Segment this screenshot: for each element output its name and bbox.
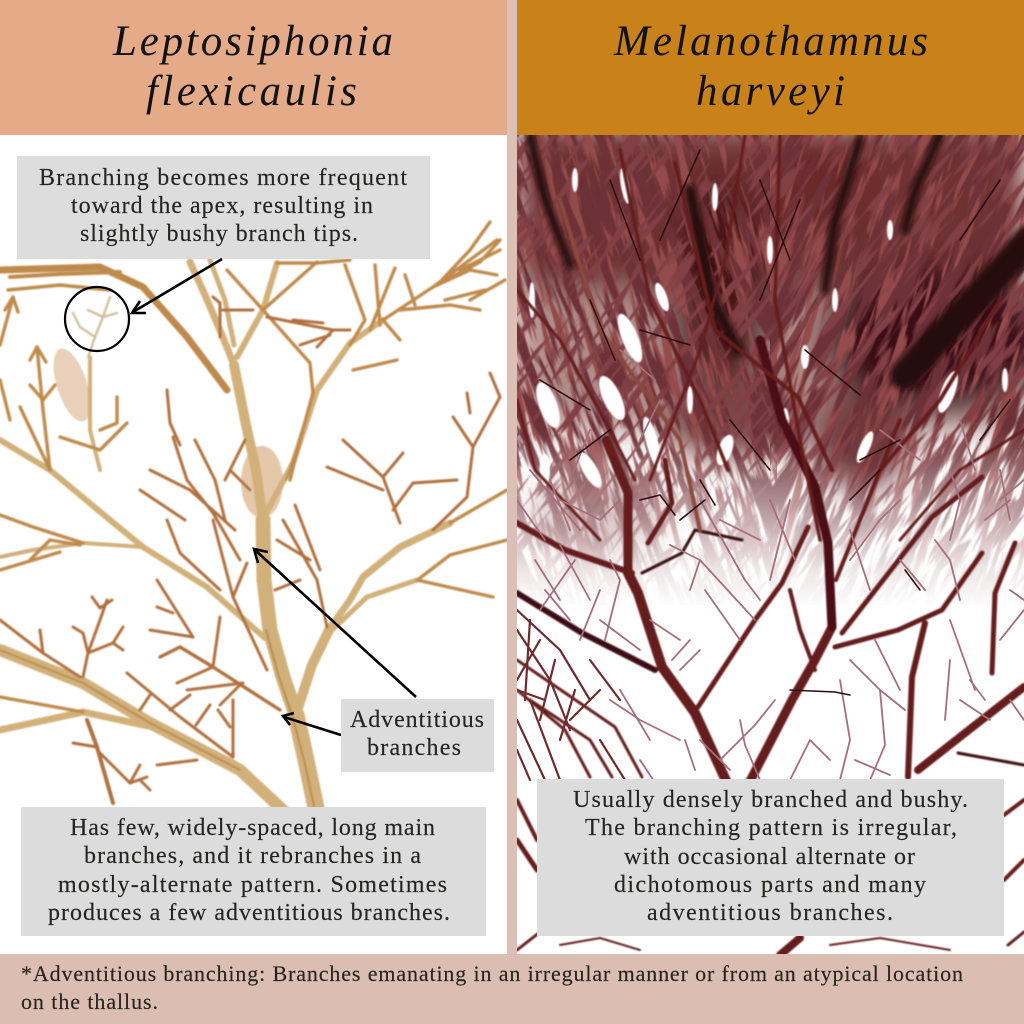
text block: Melanothamnus description: adventitious branches.	[647, 900, 893, 926]
header: Melanothamnus	[517, 0, 1024, 135]
callout: adventitious branches: branches	[367, 735, 461, 761]
header: Melanothamnus: harveyi	[696, 68, 845, 115]
arrow: to branch tip	[132, 259, 222, 313]
callout: branching frequency: Branching becomes more frequent	[39, 165, 407, 191]
header: Leptosiphonia: flexicaulis	[146, 68, 357, 115]
text block: Leptosiphonia description: produces a few adventitious branches.	[48, 900, 450, 926]
callout: branching frequency	[17, 156, 430, 259]
panel: Leptosiphonia photo	[0, 135, 507, 954]
footnote: on the thallus.	[21, 989, 158, 1014]
header: Leptosiphonia	[0, 0, 507, 135]
twig tip in circle	[73, 297, 117, 357]
header: Leptosiphonia: Leptosiphonia	[112, 18, 393, 65]
callout: branching frequency: toward the apex, resulting in	[71, 193, 373, 219]
text block: Leptosiphonia description: branches, and it rebranches in a	[84, 843, 421, 869]
text block: Melanothamnus description: with occasional alternate or	[624, 844, 915, 870]
dense lower-left branchlets	[517, 610, 625, 780]
text block: Melanothamnus description: dichotomous parts and many	[614, 872, 926, 898]
header: Melanothamnus: Melanothamnus	[613, 18, 928, 65]
icon: circle around branch tip	[65, 287, 129, 351]
text block: Melanothamnus description: The branching pattern is irregular,	[585, 815, 957, 841]
panel: Melanothamnus photo	[517, 125, 1024, 955]
arrow: to adventitious branch upper	[254, 549, 416, 697]
callout: branching frequency: slightly bushy branch tips.	[80, 221, 358, 247]
footnote	[0, 954, 1024, 1024]
text block: Leptosiphonia description: mostly-alternate pattern. Sometimes	[58, 872, 447, 898]
footnote: *Adventitious branching: Branches emanating in an irregular manner or from an atypical location	[21, 961, 963, 986]
text block: Melanothamnus description	[537, 779, 1004, 936]
text block: Melanothamnus description: Usually densely branched and bushy.	[573, 787, 968, 813]
gaps in the thallus	[529, 168, 1008, 491]
arrow: to adventitious branch lower	[283, 713, 341, 735]
text block: Leptosiphonia description	[21, 807, 486, 936]
text block: Leptosiphonia description: Has few, widely-spaced, long main	[70, 815, 435, 841]
callout: adventitious branches: Adventitious	[350, 707, 484, 733]
callout: adventitious branches	[341, 699, 494, 772]
main branches	[517, 135, 1024, 955]
